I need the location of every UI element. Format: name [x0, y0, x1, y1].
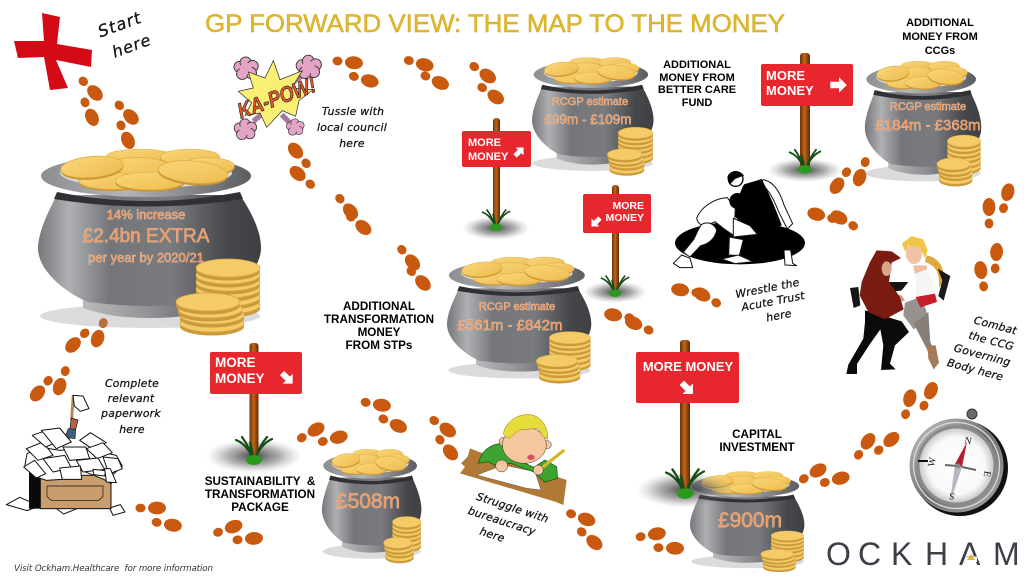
main pot text: per year by 2020/21	[88, 250, 204, 265]
caption: complete relevant paperwork: Complete	[105, 377, 159, 390]
sign: more money, pointing right: MONEY	[766, 83, 814, 98]
label: transformation money from STPs: TRANSFORMATION	[324, 313, 434, 326]
caption: struggle with bureaucracy: here	[478, 525, 506, 545]
caption: combat the CCG governing body: Governing	[952, 341, 1012, 369]
label: sustainability and transformation package: SUSTAINABILITY &	[205, 475, 316, 488]
pot: sustainability package £508m	[322, 449, 421, 563]
label: better care fund: MONEY FROM	[659, 72, 735, 84]
pot: sustainability package £508m: £508m	[336, 490, 400, 513]
caption: tussle with local council: local council	[317, 121, 387, 134]
pot: better care fund: RCGP estimate	[552, 96, 628, 108]
label: transformation money from STPs: MONEY	[358, 326, 401, 339]
pot: better care fund	[532, 58, 654, 176]
pot: better care fund: £99m - £109m	[544, 112, 632, 127]
pot: transformation money from STPs: £561m - £842m	[457, 317, 563, 334]
caption: complete relevant paperwork: here	[119, 423, 145, 436]
label: better care fund	[658, 59, 736, 109]
pot: transformation money from STPs	[447, 257, 591, 383]
sign: more money, sustainability: MONEY	[215, 371, 265, 386]
sign: more money, pointing down left: MORE	[612, 200, 644, 212]
label: sustainability and transformation package: TRANSFORMATION	[205, 488, 315, 501]
caption: tussle with local council	[317, 105, 387, 150]
caption: struggle with bureaucracy	[462, 489, 550, 556]
sign: more money, pointing down left: MONEY	[605, 212, 644, 224]
compass: N	[963, 435, 973, 448]
sign: more money, pointing down left	[583, 185, 651, 303]
label: transformation money from STPs	[324, 300, 434, 352]
caption: combat the CCG governing body: Combat	[973, 314, 1019, 338]
wrestlers illustration	[673, 171, 805, 268]
footer note: Visit Ockham.Healthcare for more information	[14, 564, 213, 574]
sign: more money, pointing up right	[462, 118, 531, 240]
sign: more money, pointing right: MORE	[766, 68, 805, 83]
main pot of gold: £2.4bn	[38, 149, 261, 336]
start here caption	[95, 7, 154, 64]
pot: capital investment £900m	[690, 472, 804, 572]
caption: complete relevant paperwork: relevant	[108, 392, 155, 405]
sign: more money, capital investment	[636, 340, 739, 508]
label: sustainability and transformation package	[205, 475, 316, 514]
pot: capital investment £900m: £900m	[718, 509, 782, 532]
Ockham logo: OCKHAM	[826, 536, 1020, 572]
sign: more money, sustainability	[206, 343, 302, 473]
caption: struggle with bureaucracy: bureaucracy	[466, 504, 538, 538]
caption: tussle with local council: here	[339, 137, 365, 150]
label: sustainability and transformation package: PACKAGE	[231, 501, 289, 514]
compass: E	[981, 470, 992, 478]
kapow burst illustration: KA-POW!	[234, 72, 319, 124]
compass	[910, 409, 1008, 516]
pot: CCG money	[865, 61, 981, 186]
sign: more money, sustainability: MORE	[215, 355, 256, 370]
title: GP FORWARD VIEW: THE MAP TO THE MONEY	[205, 10, 785, 38]
label: capital investment: CAPITAL	[732, 428, 782, 441]
kapow burst illustration	[234, 55, 321, 140]
start here caption: here	[110, 30, 154, 62]
caption: complete relevant paperwork	[100, 377, 161, 436]
label: better care fund: FUND	[682, 97, 712, 109]
sign: more money, pointing up right: MONEY	[468, 151, 509, 163]
caption: wrestle the acute trust: here	[765, 307, 793, 324]
label: capital investment	[719, 428, 796, 454]
caption: complete relevant paperwork: paperwork	[100, 407, 161, 420]
caption: tussle with local council: Tussle with	[322, 105, 384, 118]
icon: red start cross	[14, 13, 92, 90]
label: money from CCGs: CCGs	[925, 45, 955, 57]
label: better care fund: BETTER CARE	[658, 84, 736, 96]
child writing illustration	[460, 415, 567, 505]
caption: wrestle the acute trust: Wrestle the	[734, 276, 801, 301]
caption: combat the CCG governing body: the CCG	[967, 329, 1015, 353]
paperwork pile illustration	[6, 395, 125, 515]
caption: wrestle the acute trust	[734, 275, 809, 329]
caption: wrestle the acute trust: Acute Trust	[739, 289, 806, 314]
label: capital investment: INVESTMENT	[719, 441, 796, 454]
sign: more money, pointing right	[761, 53, 853, 182]
compass: W	[926, 456, 939, 468]
label: money from CCGs	[902, 17, 978, 57]
label: better care fund: ADDITIONAL	[663, 59, 731, 71]
compass: S	[948, 490, 956, 501]
pot: transformation money from STPs: RCGP estimate	[479, 301, 555, 313]
pot: CCG money: £184m - £368m	[875, 117, 981, 134]
label: transformation money from STPs: ADDITIONAL	[343, 300, 415, 313]
sign: more money, pointing up right: MORE	[468, 137, 501, 149]
pot: CCG money: RCGP estimate	[890, 101, 966, 113]
fighters illustration	[846, 236, 950, 374]
main pot text	[83, 207, 210, 265]
sign: more money, capital investment: MORE MONEY	[643, 359, 733, 374]
label: money from CCGs: MONEY FROM	[902, 31, 978, 43]
start here caption: Start	[95, 8, 144, 41]
main pot text: 14% increase	[107, 207, 185, 222]
label: money from CCGs: ADDITIONAL	[906, 17, 974, 29]
caption: combat the CCG governing body	[946, 310, 1020, 384]
label: transformation money from STPs: FROM STPs	[346, 339, 413, 352]
main pot text: £2.4bn EXTRA	[83, 226, 210, 247]
caption: combat the CCG governing body: Body here	[946, 356, 1005, 384]
caption: struggle with bureaucracy: Struggle with	[475, 490, 550, 526]
